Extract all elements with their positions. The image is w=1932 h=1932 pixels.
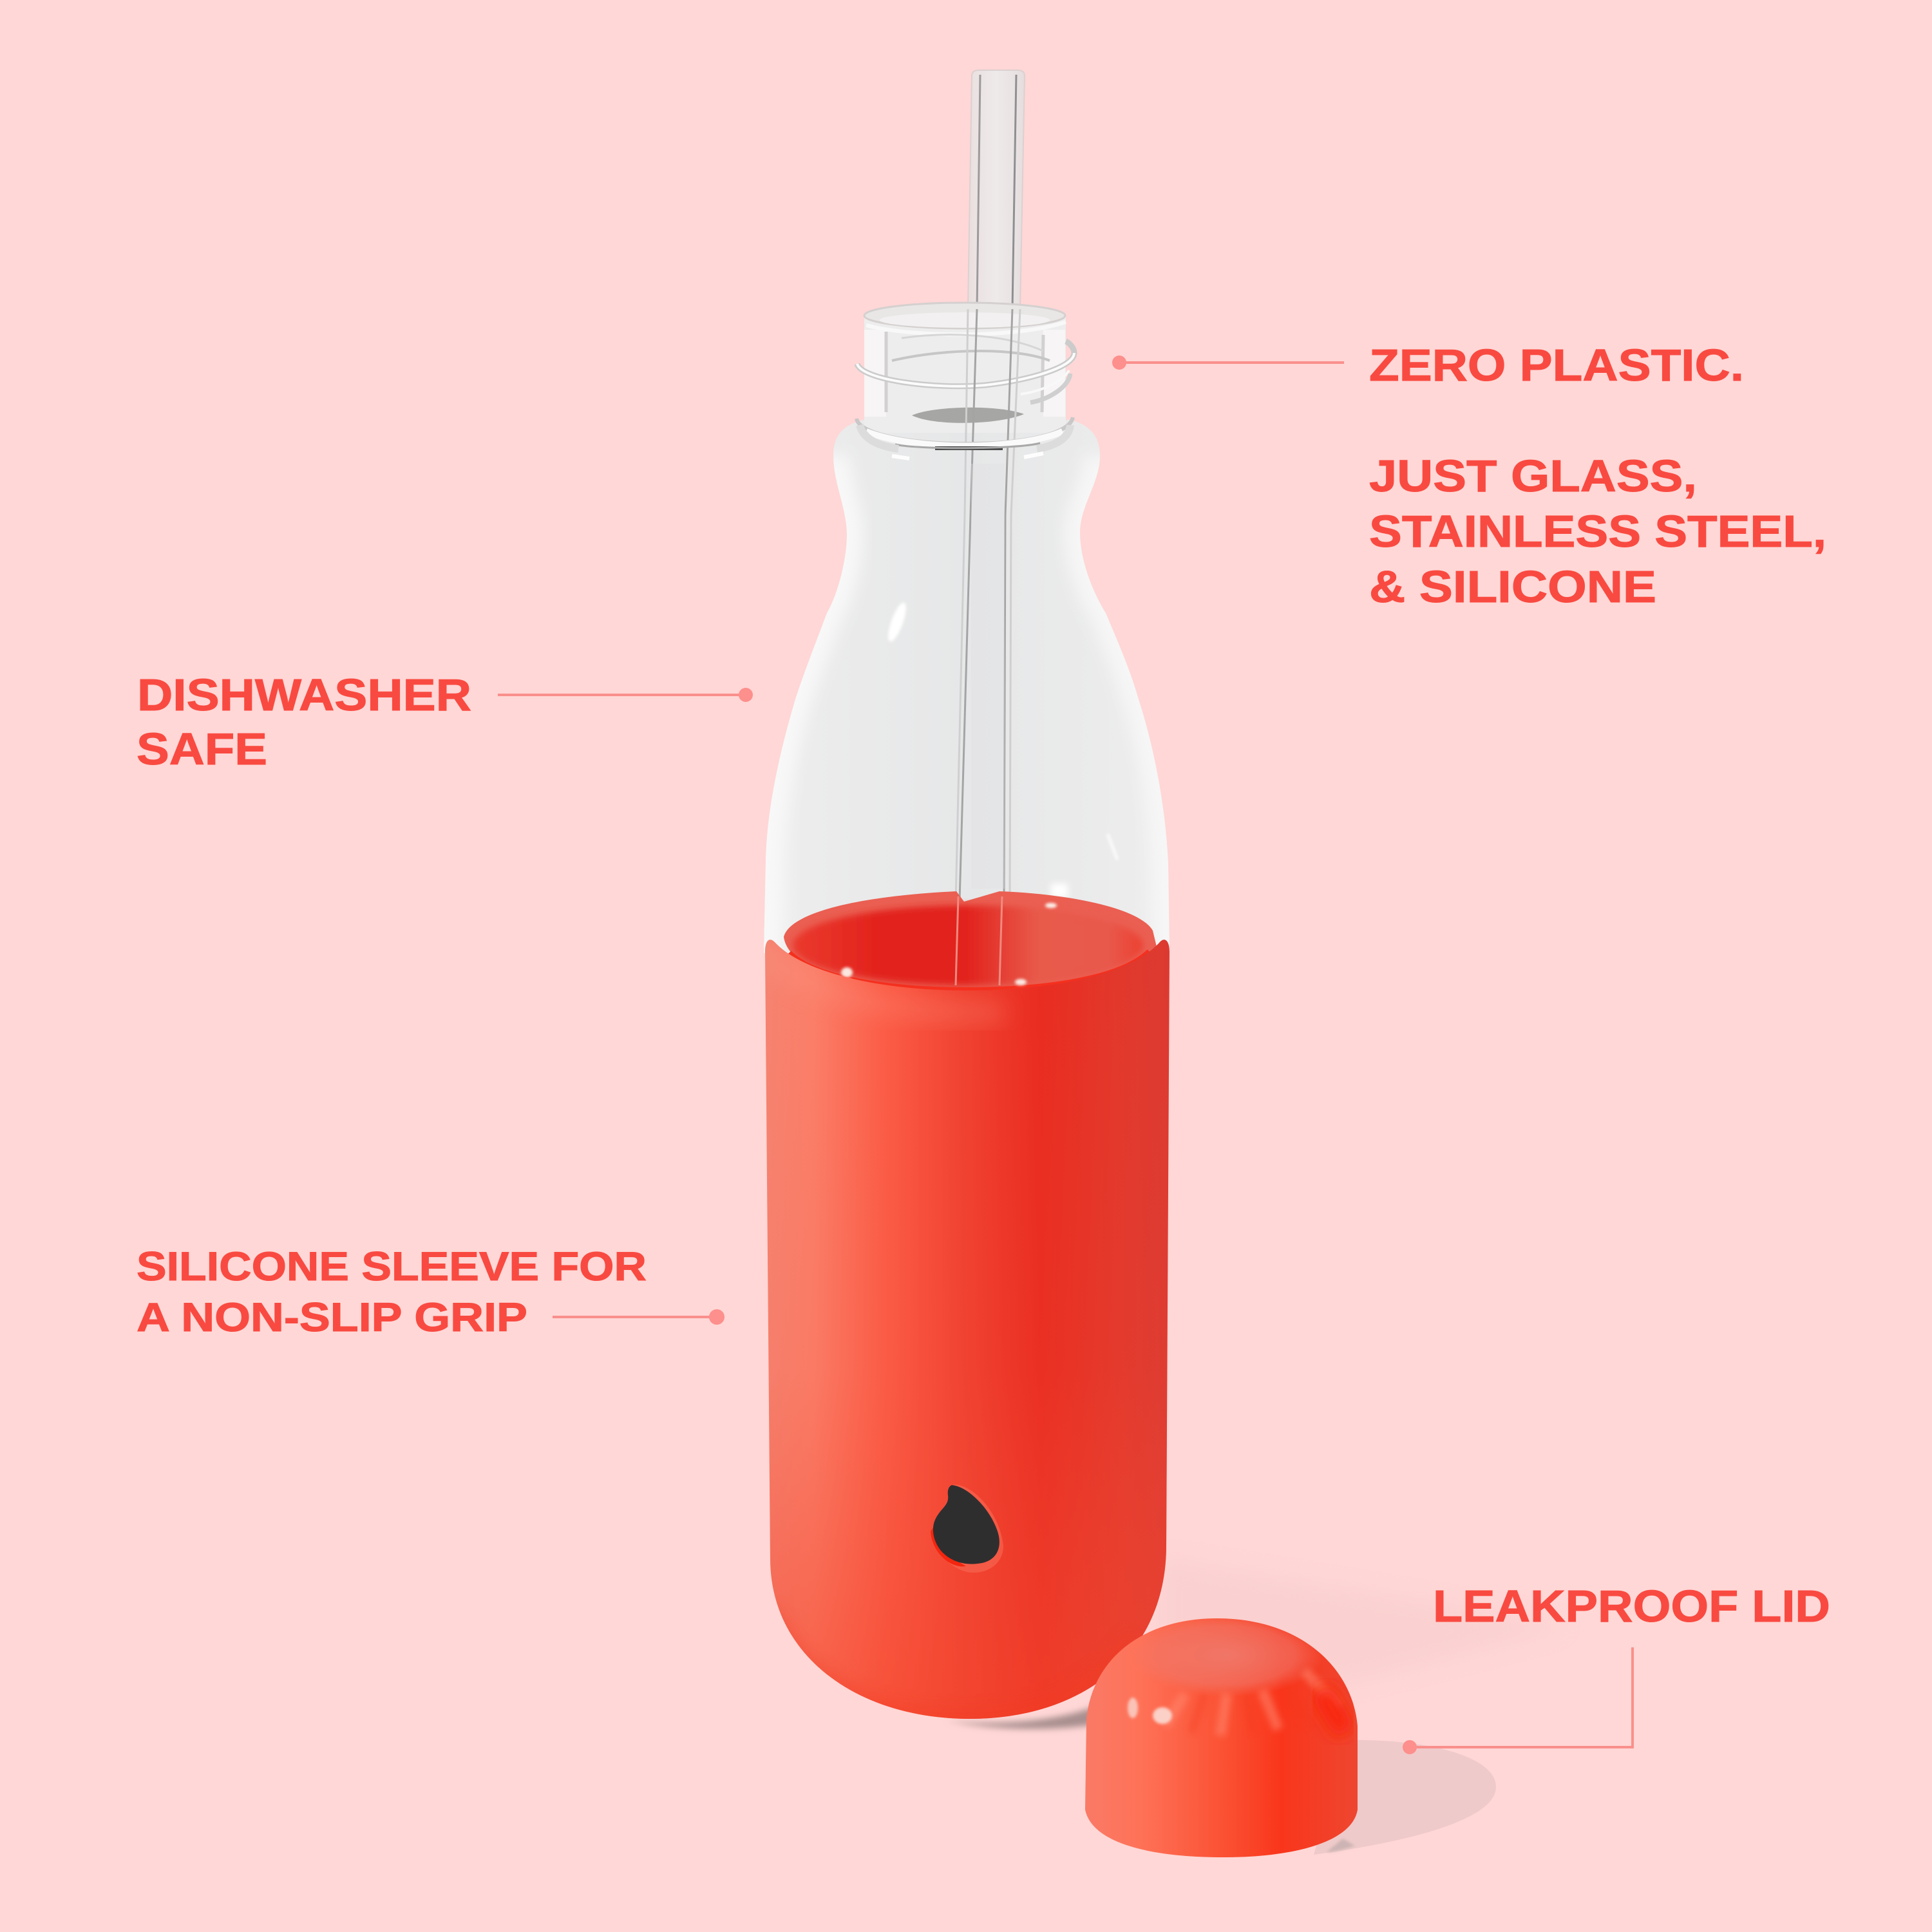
callout text: LEAKPROOF LID xyxy=(1433,1581,1830,1631)
callout text: A NON-SLIP GRIP xyxy=(137,1295,527,1340)
callout text: DISHWASHER xyxy=(137,670,471,720)
callout leader line xyxy=(498,688,753,702)
callout text: ZERO PLASTIC. xyxy=(1369,340,1744,390)
glass body xyxy=(764,420,1170,953)
callout: leakproof lid xyxy=(1403,1581,1830,1754)
callout text: SAFE xyxy=(137,724,267,774)
straw, inside bottle xyxy=(956,309,1020,902)
red interior visible through glass xyxy=(784,891,1157,992)
callout: dishwasher safe xyxy=(137,670,753,774)
lid cast shadow on ground xyxy=(1314,1740,1496,1855)
callout text: STAINLESS STEEL, xyxy=(1369,506,1826,556)
callout text: SILICONE SLEEVE FOR xyxy=(137,1244,647,1289)
bottle thread rings xyxy=(857,341,1074,386)
callout text xyxy=(137,670,471,774)
silicone sleeve xyxy=(760,934,1172,1726)
callout text: JUST GLASS, xyxy=(1369,451,1697,501)
bottle xyxy=(760,70,1172,1726)
callout text xyxy=(137,1244,647,1340)
air vent teardrop xyxy=(931,1484,1003,1573)
callout text xyxy=(1369,340,1826,612)
bottle cast shadow on ground xyxy=(947,1558,1571,1729)
callout leader line xyxy=(1112,355,1344,370)
callout: silicone sleeve xyxy=(137,1244,724,1340)
shoulder ring xyxy=(857,417,1073,459)
callout text: & SILICONE xyxy=(1369,562,1656,612)
callout leader line xyxy=(553,1309,724,1325)
glass highlights xyxy=(885,601,909,643)
callout: zero plastic xyxy=(1112,340,1826,612)
leakproof lid xyxy=(1085,1613,1358,1857)
glass neck xyxy=(857,303,1074,433)
straw, upper part xyxy=(968,70,1025,309)
callout leader line xyxy=(1403,1647,1633,1754)
neck base dark opening xyxy=(912,408,1024,423)
